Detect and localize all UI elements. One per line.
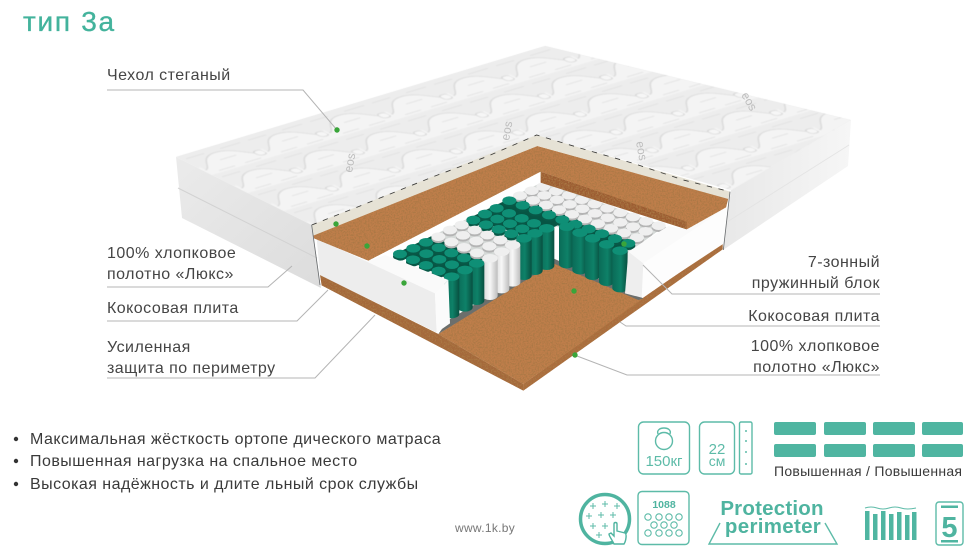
icon: protection perimeter: perimeter (725, 515, 821, 538)
icon: quilted fabric touch (580, 494, 630, 544)
leader line: spring block (643, 265, 880, 294)
title: тип 3а (23, 6, 116, 37)
white springs front zone (431, 221, 507, 259)
perimeter foam, right (625, 207, 727, 298)
icon: height: 22 (709, 441, 725, 458)
label: coconut right: Кокосовая плита (748, 308, 880, 325)
bottom coconut slab (320, 243, 723, 391)
mattress quilted cover top (176, 46, 851, 225)
white springs back zone (513, 182, 666, 244)
label: spring block (752, 254, 881, 292)
label: spring block: пружинный блок (752, 275, 881, 292)
feature bullet list: Максимальная жёсткость ортопе дического матраса (30, 431, 441, 448)
front row of springs, right arm (559, 222, 628, 292)
label: cotton right: полотно «Люкс» (753, 359, 880, 376)
mattress quilted cover top: eos (498, 120, 515, 142)
label: perimeter: защита по периметру (107, 360, 276, 377)
cotton layer strip (312, 135, 730, 236)
spring block (393, 182, 666, 334)
torn cover edge (312, 135, 730, 225)
mattress quilted cover top: eos (633, 140, 650, 162)
feature bullet list: Повышенная нагрузка на спальное место (30, 453, 358, 470)
leader line: cotton left (107, 266, 292, 287)
label: cotton right: 100% хлопковое (751, 338, 880, 355)
leader line: coconut left (107, 290, 328, 321)
leader line: cotton right (577, 356, 880, 375)
icon: protection perimeter: Protection (720, 497, 824, 520)
mattress right side face (723, 120, 851, 250)
front row of springs, left arm (444, 224, 554, 318)
mattress cover cut edges (312, 192, 730, 285)
icon: max load: 150кг (645, 453, 683, 470)
leader line: cover (107, 90, 337, 130)
firmness indicator: Повышенная / Повышенная (774, 463, 962, 479)
label: cotton left: полотно «Люкс» (107, 266, 234, 283)
label: perimeter: Усиленная (107, 339, 191, 356)
icon: 5 year warranty: 5 (941, 512, 958, 544)
perimeter foam, left (317, 238, 450, 333)
icon: max load (638, 422, 690, 474)
mattress left side face (176, 157, 321, 288)
label: coconut left: Кокосовая плита (107, 300, 239, 317)
marker dots (333, 127, 627, 358)
icon: protection perimeter (709, 497, 837, 544)
upper coconut slab (313, 146, 728, 261)
label: cover: Чехол стеганый (107, 67, 231, 84)
green springs middle zone (466, 196, 635, 250)
green springs front-left zone (393, 238, 471, 278)
icon: 5 year warranty (936, 502, 963, 545)
label: perimeter (107, 339, 276, 377)
icon: 1088 springs (638, 492, 689, 544)
watermark: www.1k.by (454, 521, 515, 535)
label: cotton left (107, 245, 236, 283)
mattress quilted cover top: eos (341, 152, 358, 174)
icon: height: см (709, 453, 725, 469)
feature bullet list (14, 431, 441, 493)
leader line: coconut right (620, 322, 880, 326)
icon: 1088 springs: 1088 (652, 499, 676, 511)
leader line: perimeter (107, 315, 375, 378)
mattress illustration (176, 46, 851, 391)
label: cotton left: 100% хлопковое (107, 245, 236, 262)
feature bullet list: Высокая надёжность и длите льный срок службы (30, 476, 419, 493)
mattress quilted cover top: eos (738, 90, 760, 113)
label: cotton right (751, 338, 880, 376)
label: spring block: 7-зонный (808, 254, 880, 271)
cutaway layers (312, 135, 730, 391)
icon: height (700, 422, 752, 474)
firmness indicator (774, 422, 963, 479)
icon: spring zones (865, 507, 916, 540)
